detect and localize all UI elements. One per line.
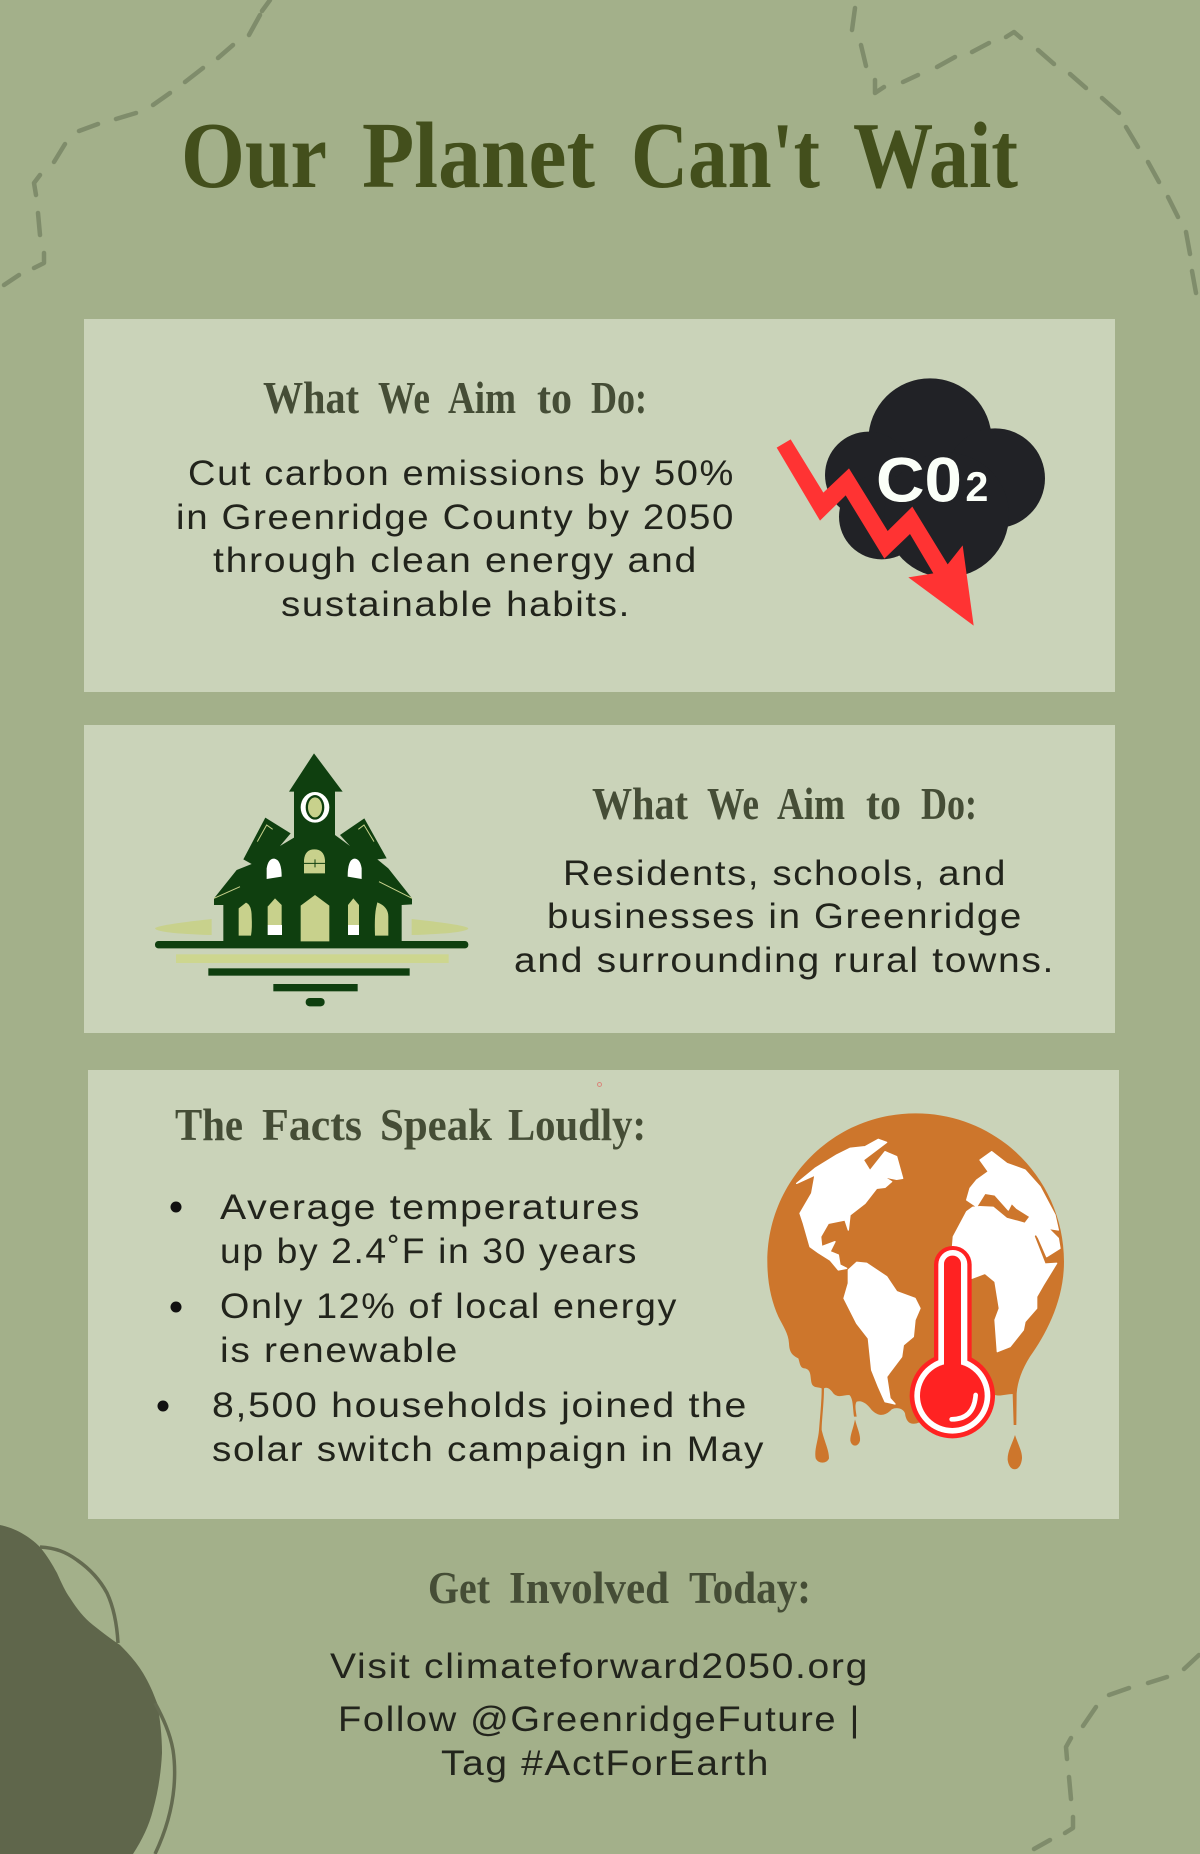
heading: get involved: Today: bbox=[689, 1563, 811, 1613]
title bbox=[181, 104, 1018, 208]
text block: audience bbox=[514, 854, 1055, 980]
bulleted fact list: solar switch campaign in May bbox=[212, 1430, 765, 1469]
bulleted fact list: 8,500 households joined the bbox=[212, 1386, 748, 1425]
text block: get involved: Tag #ActForEarth bbox=[441, 1744, 770, 1783]
heading: aim: Do: bbox=[591, 373, 647, 423]
heading: aim: We bbox=[378, 373, 430, 423]
panel: facts bbox=[88, 1070, 1119, 1519]
heading: get involved bbox=[428, 1563, 811, 1613]
heading: audience: Aim bbox=[777, 779, 845, 829]
text block: audience: Residents, schools, and bbox=[563, 854, 1007, 893]
text block: get involved bbox=[330, 1647, 869, 1783]
bulleted fact list bbox=[158, 1188, 765, 1469]
heading: facts: The bbox=[175, 1100, 243, 1150]
icon: CO2 cloud with falling arrow bbox=[777, 378, 1045, 626]
bulleted fact list: Average temperatures bbox=[220, 1188, 641, 1227]
heading: facts: Loudly: bbox=[508, 1100, 646, 1150]
bulleted fact list: up by 2.4˚F in 30 years bbox=[220, 1232, 638, 1271]
text block: audience: businesses in Greenridge bbox=[547, 897, 1023, 936]
heading: get involved: Get bbox=[428, 1563, 490, 1613]
heading: audience bbox=[592, 779, 977, 829]
panel: aim bbox=[84, 319, 1115, 692]
text block: get involved: Follow @GreenridgeFuture | bbox=[338, 1700, 861, 1739]
text block: aim bbox=[176, 454, 735, 624]
heading: facts: Speak bbox=[380, 1100, 492, 1150]
icon: melting globe with thermometer bbox=[767, 1113, 1064, 1469]
heading: audience: Do: bbox=[921, 779, 977, 829]
small marker dot bbox=[598, 1082, 602, 1086]
icon: CO2 cloud with falling arrow: C0 bbox=[876, 446, 962, 516]
heading: get involved: Involved bbox=[509, 1563, 669, 1613]
title: Our bbox=[181, 104, 327, 208]
decorative blob: bottom left bbox=[0, 1525, 175, 1854]
title: Planet bbox=[362, 104, 595, 208]
heading: audience: We bbox=[707, 779, 759, 829]
text block: aim: sustainable habits. bbox=[281, 585, 631, 624]
panel: audience bbox=[84, 725, 1115, 1033]
text block: get involved: Visit climateforward2050.org bbox=[330, 1647, 869, 1686]
heading: aim: Aim bbox=[448, 373, 516, 423]
text block: aim: Cut carbon emissions by 50% bbox=[188, 454, 735, 493]
heading: facts bbox=[175, 1100, 646, 1150]
heading: aim: to bbox=[537, 373, 572, 423]
text block: aim: through clean energy and bbox=[213, 541, 698, 580]
title: Wait bbox=[853, 104, 1018, 208]
icon: CO2 cloud with falling arrow: 2 bbox=[965, 464, 988, 510]
heading: audience: to bbox=[866, 779, 901, 829]
heading: aim bbox=[263, 373, 647, 423]
text block: audience: and surrounding rural towns. bbox=[514, 941, 1055, 980]
bulleted fact list: Only 12% of local energy bbox=[220, 1287, 678, 1326]
title: Can't bbox=[631, 104, 820, 208]
bulleted fact list: is renewable bbox=[220, 1331, 459, 1370]
heading: audience: What bbox=[592, 779, 688, 829]
heading: aim: What bbox=[263, 373, 359, 423]
icon: town hall bbox=[155, 753, 468, 1006]
heading: facts: Facts bbox=[262, 1100, 362, 1150]
text block: aim: in Greenridge County by 2050 bbox=[176, 498, 735, 537]
